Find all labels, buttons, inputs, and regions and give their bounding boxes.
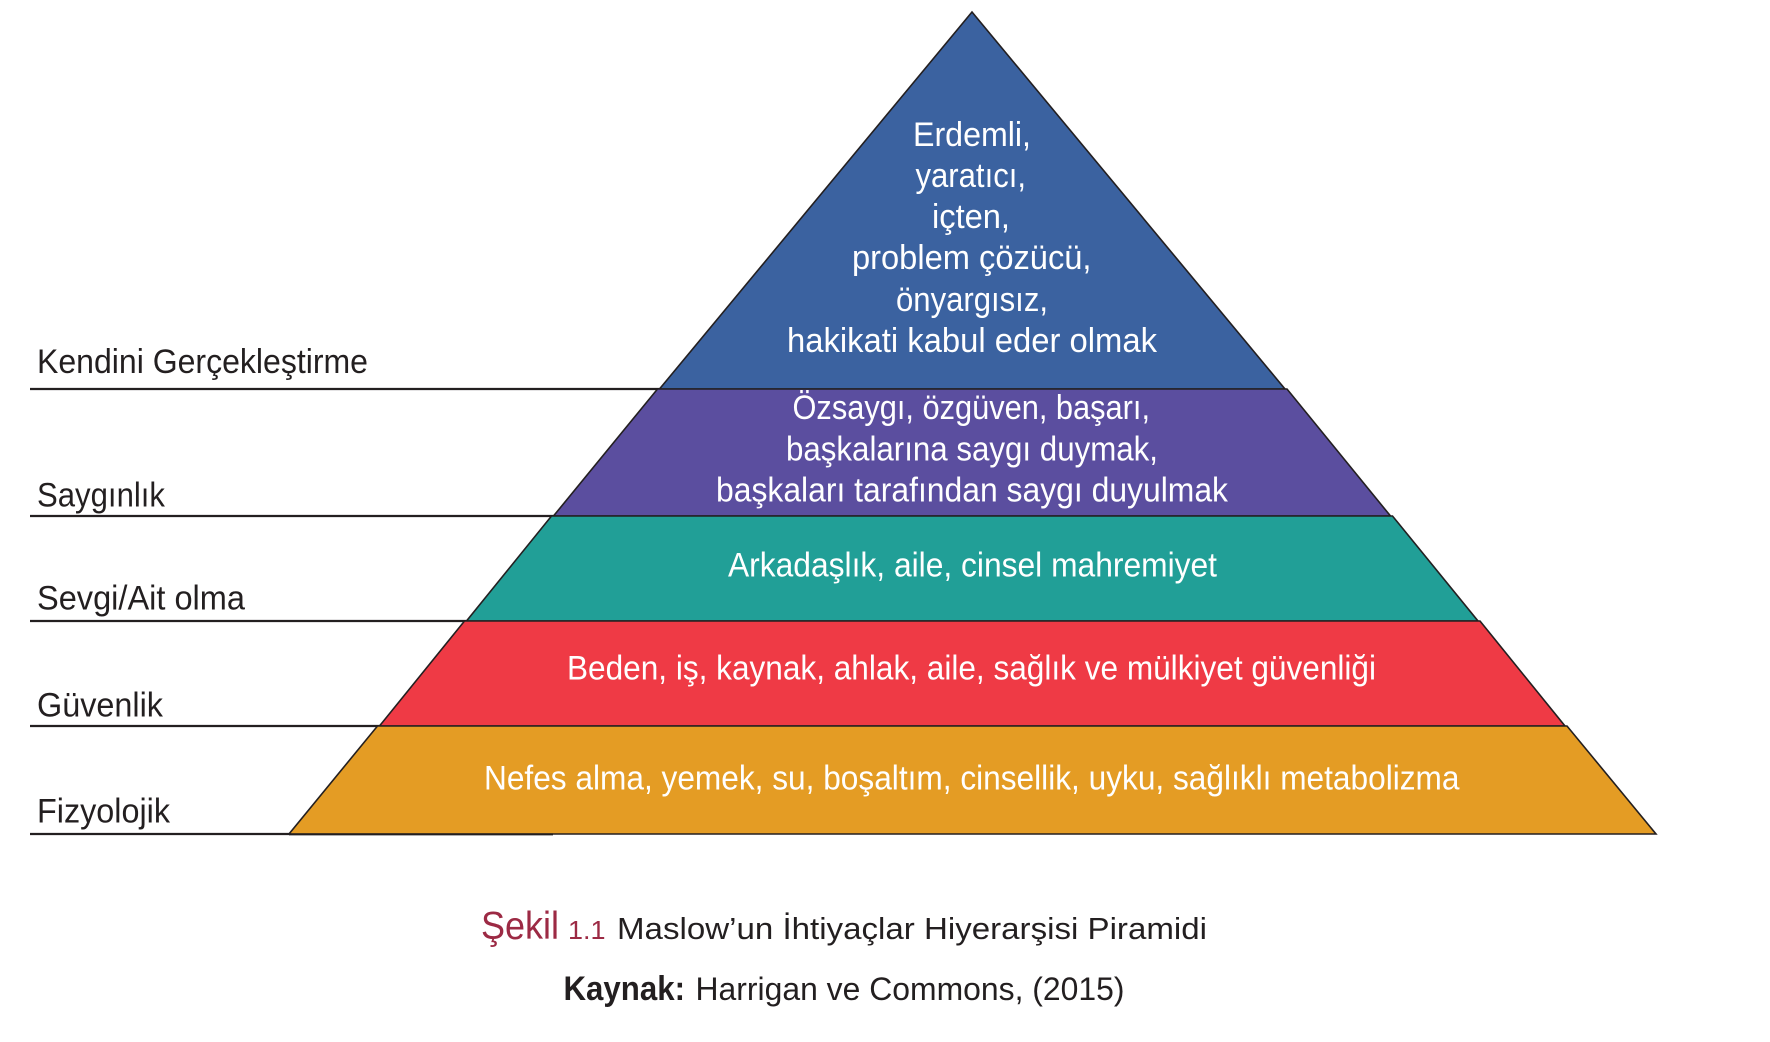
level 5: self-actualization (blue): hakikati kabul eder olmak bbox=[787, 322, 1158, 360]
level 4: esteem (purple): başkaları tarafından saygı duyulmak bbox=[716, 472, 1229, 510]
level 1: physiological (orange): Nefes alma, yemek, su, boşaltım, cinsellik, uyku, sağlıklı metabolizma bbox=[484, 760, 1460, 798]
caption: figure title: Şekil bbox=[481, 905, 559, 948]
level 4: esteem (purple): başkalarına saygı duymak, bbox=[786, 430, 1158, 468]
level 2: safety (red): Beden, iş, kaynak, ahlak, aile, sağlık ve mülkiyet güvenliği bbox=[567, 650, 1376, 688]
level 2: safety (red) bbox=[380, 621, 1565, 726]
caption: figure title: 1.1 bbox=[568, 915, 606, 945]
label: Sevgi/Ait olma: Sevgi/Ait olma bbox=[37, 580, 245, 618]
level 4: esteem (purple): Özsaygı, özgüven, başarı, bbox=[792, 389, 1150, 427]
pyramid level labels with leader lines bbox=[30, 343, 660, 834]
caption: source: Harrigan ve Commons, (2015) bbox=[696, 971, 1124, 1007]
label: Güvenlik: Güvenlik bbox=[37, 686, 164, 724]
label: Fizyolojik: Fizyolojik bbox=[37, 792, 171, 830]
label: Saygınlık: Saygınlık bbox=[37, 476, 166, 514]
level 3: love and belonging (teal): Arkadaşlık, aile, cinsel mahremiyet bbox=[728, 546, 1218, 584]
level 5: self-actualization (blue): yaratıcı, bbox=[916, 157, 1026, 195]
level 4: esteem (purple) bbox=[554, 389, 1390, 516]
level 5: self-actualization (blue) bbox=[660, 12, 1285, 389]
caption: figure title: Maslow’un İhtiyaçlar Hiyerarşisi Piramidi bbox=[617, 911, 1207, 946]
caption: figure title bbox=[481, 905, 1207, 948]
caption: source: Kaynak: bbox=[564, 970, 685, 1008]
level 5: self-actualization (blue): içten, bbox=[932, 198, 1010, 236]
level 3: love and belonging (teal) bbox=[466, 516, 1478, 621]
label: Kendini Gerçekleştirme: Kendini Gerçekleştirme bbox=[37, 343, 368, 381]
level 1: physiological (orange) bbox=[289, 726, 1656, 834]
level 5: self-actualization (blue): Erdemli, bbox=[913, 116, 1031, 154]
level 5: self-actualization (blue): önyargısız, bbox=[896, 281, 1048, 319]
level 5: self-actualization (blue): problem çözücü, bbox=[852, 239, 1092, 277]
pyramid bbox=[289, 12, 1656, 834]
